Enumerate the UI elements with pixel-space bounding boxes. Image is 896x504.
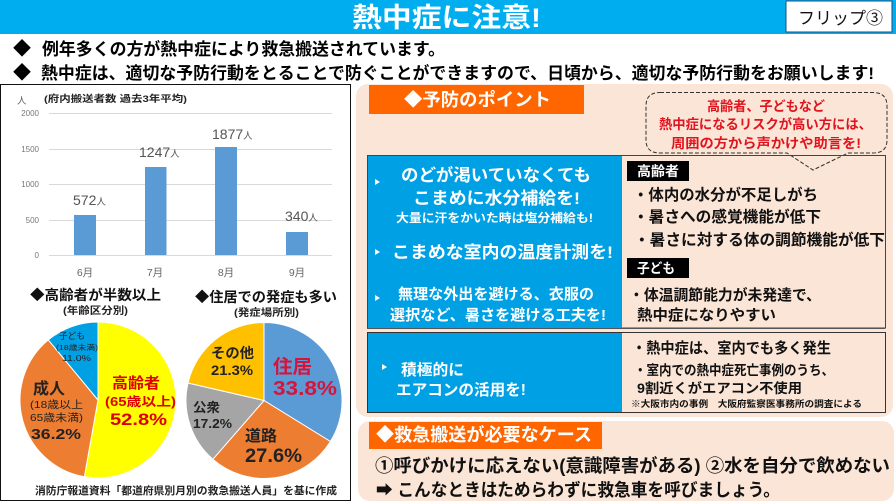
bar chart: 人 bbox=[17, 96, 27, 107]
callout: 高齢者、子どもなど bbox=[707, 98, 825, 114]
air conditioner facts: 9割近くがエアコン不使用 bbox=[637, 380, 802, 396]
elderly label bbox=[627, 161, 689, 181]
pie chart: age: 高齢者 bbox=[112, 374, 160, 392]
advice: air conditioner: 積極的に bbox=[401, 360, 464, 379]
advice box 2 bbox=[367, 332, 886, 413]
intro line 1: ◆ bbox=[13, 39, 31, 59]
prevention heading bbox=[369, 85, 584, 114]
bar chart: 1247人 bbox=[139, 144, 180, 160]
pie chart: location: 住居 bbox=[273, 356, 312, 378]
bar chart: 1000 bbox=[21, 180, 40, 189]
advice: avoid heat: 選択など、暑さを避ける工夫を! bbox=[390, 306, 606, 324]
pie chart: age: (18歳以上 bbox=[30, 399, 83, 411]
advice: hydration: 大量に汗をかいた時は塩分補給も! bbox=[396, 210, 593, 225]
intro line 2: ◆ bbox=[13, 63, 31, 83]
header band bbox=[0, 0, 896, 34]
children list: 熱中症になりやすい bbox=[637, 306, 776, 324]
pie chart: location: 17.2% bbox=[193, 416, 232, 431]
pie chart: location: 公衆 bbox=[193, 400, 220, 415]
advice: avoid heat: 無理な外出を避ける、衣服の bbox=[398, 285, 594, 303]
intro line 1: 例年多くの方が熱中症により救急搬送されています。 bbox=[42, 39, 445, 59]
advice: air conditioner: エアコンの活用を! bbox=[396, 381, 526, 399]
bar chart: 572人 bbox=[73, 192, 106, 208]
bar chart: 2000 bbox=[21, 109, 40, 118]
advice: hydration bbox=[375, 165, 593, 225]
pie chart: location: その他 bbox=[211, 345, 254, 361]
title: 熱中症に注意! bbox=[352, 3, 541, 33]
emergency heading bbox=[369, 422, 602, 449]
bar chart: 1500 bbox=[21, 145, 40, 154]
bar chart: 500 bbox=[26, 216, 40, 225]
children label: 子ども bbox=[637, 261, 675, 276]
pie chart: location: 道路 bbox=[245, 426, 277, 445]
bar chart: 6月 bbox=[77, 267, 93, 279]
advice: hydration: のどが渇いていなくても bbox=[401, 165, 591, 185]
emergency call advice: ➡ こんなときはためらわずに救急車を呼びましょう。 bbox=[376, 480, 780, 500]
pie chart: age: 65歳未満) bbox=[30, 412, 83, 424]
panel: statistics bbox=[0, 84, 350, 500]
flip label: フリップ③ bbox=[798, 9, 883, 28]
children list: ・体温調節能力が未発達で、 bbox=[629, 286, 821, 304]
age pie heading: ◆高齢者が半数以上 bbox=[30, 287, 161, 303]
bar chart: 1877人 bbox=[212, 126, 253, 142]
emergency heading: ◆救急搬送が必要なケース bbox=[376, 424, 592, 445]
children list bbox=[629, 286, 821, 324]
intro line 2: 熱中症は、適切な予防行動をとることで防ぐことができますので、日頃から、適切な予防行動をお願いします! bbox=[41, 63, 874, 83]
pie chart: age: (18歳未満) bbox=[56, 342, 99, 352]
bar chart: 0 bbox=[35, 251, 40, 260]
bar chart bbox=[17, 96, 332, 279]
air conditioner facts: ・熱中症は、室内でも多く発生 bbox=[632, 339, 831, 357]
location pie heading: (発症場所別) bbox=[234, 306, 299, 319]
elderly list: ・暑さへの感覚機能が低下 bbox=[633, 207, 821, 226]
location pie heading: ◆住居での発症も多い bbox=[195, 289, 337, 305]
bar chart: 340人 bbox=[285, 208, 318, 224]
location pie heading bbox=[195, 289, 337, 319]
pie chart: age: 36.2% bbox=[31, 426, 81, 443]
pie chart: location bbox=[186, 322, 342, 478]
pie chart: age: (65歳以上) bbox=[105, 395, 176, 409]
bar chart: 8月 bbox=[218, 267, 234, 279]
air conditioner facts: ※大阪市内の事例 大阪府監察医事務所の調査による bbox=[631, 398, 862, 409]
pie chart: age bbox=[20, 322, 176, 478]
elderly list: ・暑さに対する体の調節機能が低下 bbox=[634, 230, 885, 249]
pie chart: age: 52.8% bbox=[110, 410, 167, 429]
pie chart: location: 21.3% bbox=[211, 362, 254, 378]
elderly list: ・体内の水分が不足しがち bbox=[633, 185, 818, 204]
prevention heading: ◆予防のポイント bbox=[404, 89, 551, 110]
age pie heading bbox=[30, 287, 161, 317]
advice: avoid heat bbox=[375, 285, 606, 324]
pie chart: age: 成人 bbox=[33, 379, 65, 398]
panel: emergency cases bbox=[358, 421, 894, 501]
panel: prevention points bbox=[356, 84, 893, 417]
advice: hydration: こまめに水分補給を! bbox=[413, 189, 580, 208]
air conditioner facts bbox=[631, 339, 862, 409]
callout: 熱中症になるリスクが高い方には、 bbox=[659, 116, 872, 132]
advice: air conditioner bbox=[382, 360, 526, 399]
elderly list bbox=[633, 185, 885, 249]
advice box 1 bbox=[367, 155, 886, 328]
emergency criteria: ①呼びかけに応えない(意識障害がある) ②水を自分で飲めない bbox=[375, 455, 890, 476]
advice: temperature: こまめな室内の温度計測を! bbox=[392, 243, 613, 262]
pie chart: location: 33.8% bbox=[273, 378, 337, 400]
age pie heading: (年齢区分別) bbox=[63, 304, 128, 317]
callout bbox=[646, 92, 887, 170]
pie chart: location: 27.6% bbox=[245, 446, 302, 467]
children label bbox=[627, 258, 689, 278]
source note: 消防庁報道資料「都道府県別月別の救急搬送人員」を基に作成 bbox=[35, 484, 338, 497]
flip label bbox=[786, 1, 892, 32]
air conditioner facts: ・室内での熱中症死亡事例のうち、 bbox=[634, 362, 834, 378]
bar chart: 7月 bbox=[147, 267, 163, 279]
elderly label: 高齢者 bbox=[637, 163, 679, 179]
callout: 周囲の方から声かけや助言を! bbox=[671, 135, 861, 151]
bar chart: 9月 bbox=[289, 267, 305, 279]
pie chart: age: 11.0% bbox=[62, 353, 92, 363]
pie chart: age: 子ども bbox=[59, 331, 85, 341]
chart subtitle: (府内搬送者数 過去3年平均) bbox=[44, 93, 187, 105]
